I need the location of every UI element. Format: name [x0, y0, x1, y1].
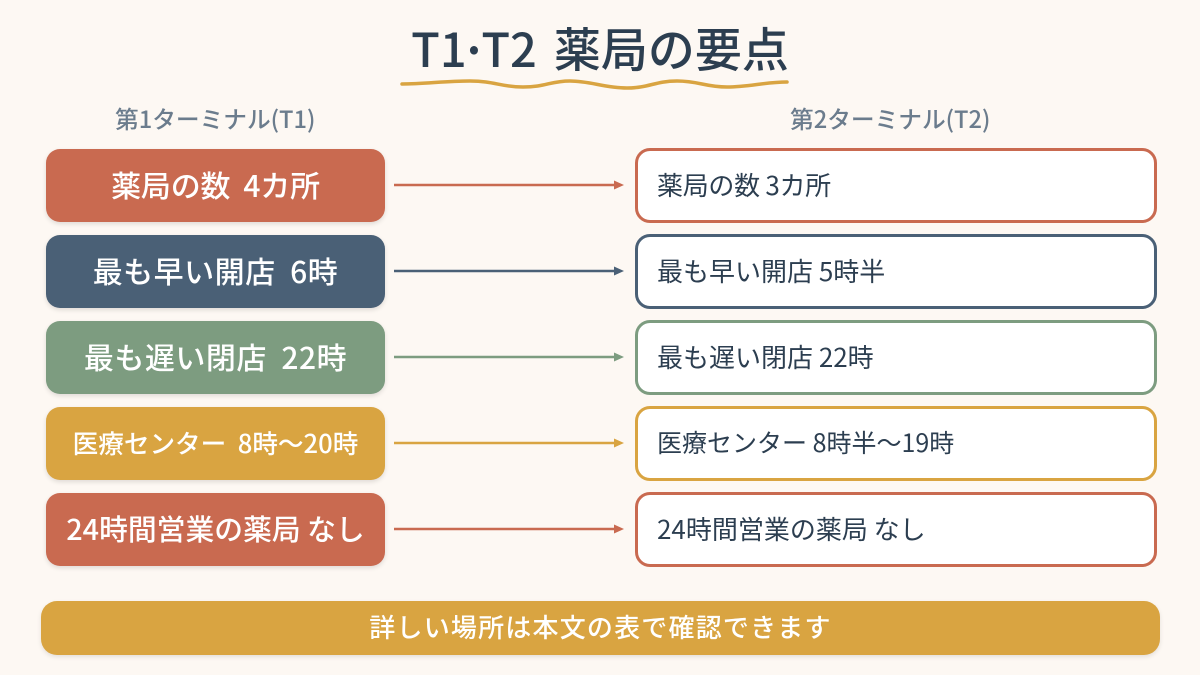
- title: T1 T2: [411, 12, 537, 80]
- T2 box: earliest opening: [635, 234, 1157, 309]
- arrow: earliest opening: [394, 266, 624, 276]
- title: •: [469, 24, 479, 68]
- T2 box: earliest opening: 最も早い開店 5時半: [657, 252, 885, 288]
- T1 box: 24-hour pharmacy: 24時間営業の薬局 なし: [66, 508, 365, 548]
- T1 box: latest closing: 最も遅い閉店 22時: [84, 334, 347, 378]
- T2 box: 24-hour pharmacy: [635, 492, 1157, 567]
- heading: T2 column: 第2ターミナル(T2): [790, 101, 990, 135]
- title: 薬局の要点: [554, 12, 789, 80]
- T2 box: latest closing: 最も遅い閉店 22時: [657, 338, 874, 374]
- T2 box: pharmacies count: 薬局の数 3カ所: [657, 166, 831, 202]
- T2 box: pharmacies count: [635, 148, 1157, 223]
- heading: T1 column: 第1ターミナル(T1): [115, 101, 315, 135]
- arrow: 24-hour pharmacy: [394, 524, 624, 534]
- T1 box: medical center: 医療センター 8時～20時: [73, 424, 358, 460]
- T1 box: latest closing: [46, 321, 385, 394]
- wavy title underline: [400, 79, 789, 90]
- T1 box: 24-hour pharmacy: [46, 493, 385, 566]
- T2 box: latest closing: [635, 320, 1157, 395]
- T2 box: 24-hour pharmacy: 24時間営業の薬局 なし: [657, 510, 926, 546]
- arrow: medical center: [394, 438, 624, 448]
- T2 box: medical center: [635, 406, 1157, 481]
- footer banner: [41, 601, 1160, 655]
- T1 box: pharmacies count: 薬局の数 4カ所: [111, 162, 320, 206]
- arrow: pharmacies count: [394, 180, 624, 190]
- arrow: latest closing: [394, 352, 624, 362]
- T1 box: medical center: [46, 407, 385, 480]
- title: [411, 12, 789, 80]
- T1 box: pharmacies count: [46, 149, 385, 222]
- T1 box: earliest opening: [46, 235, 385, 308]
- footer banner: 詳しい場所は本文の表で確認できます: [369, 608, 832, 645]
- T1 box: earliest opening: 最も早い開店 6時: [93, 248, 338, 292]
- T2 box: medical center: 医療センター 8時半～19時: [657, 424, 954, 460]
